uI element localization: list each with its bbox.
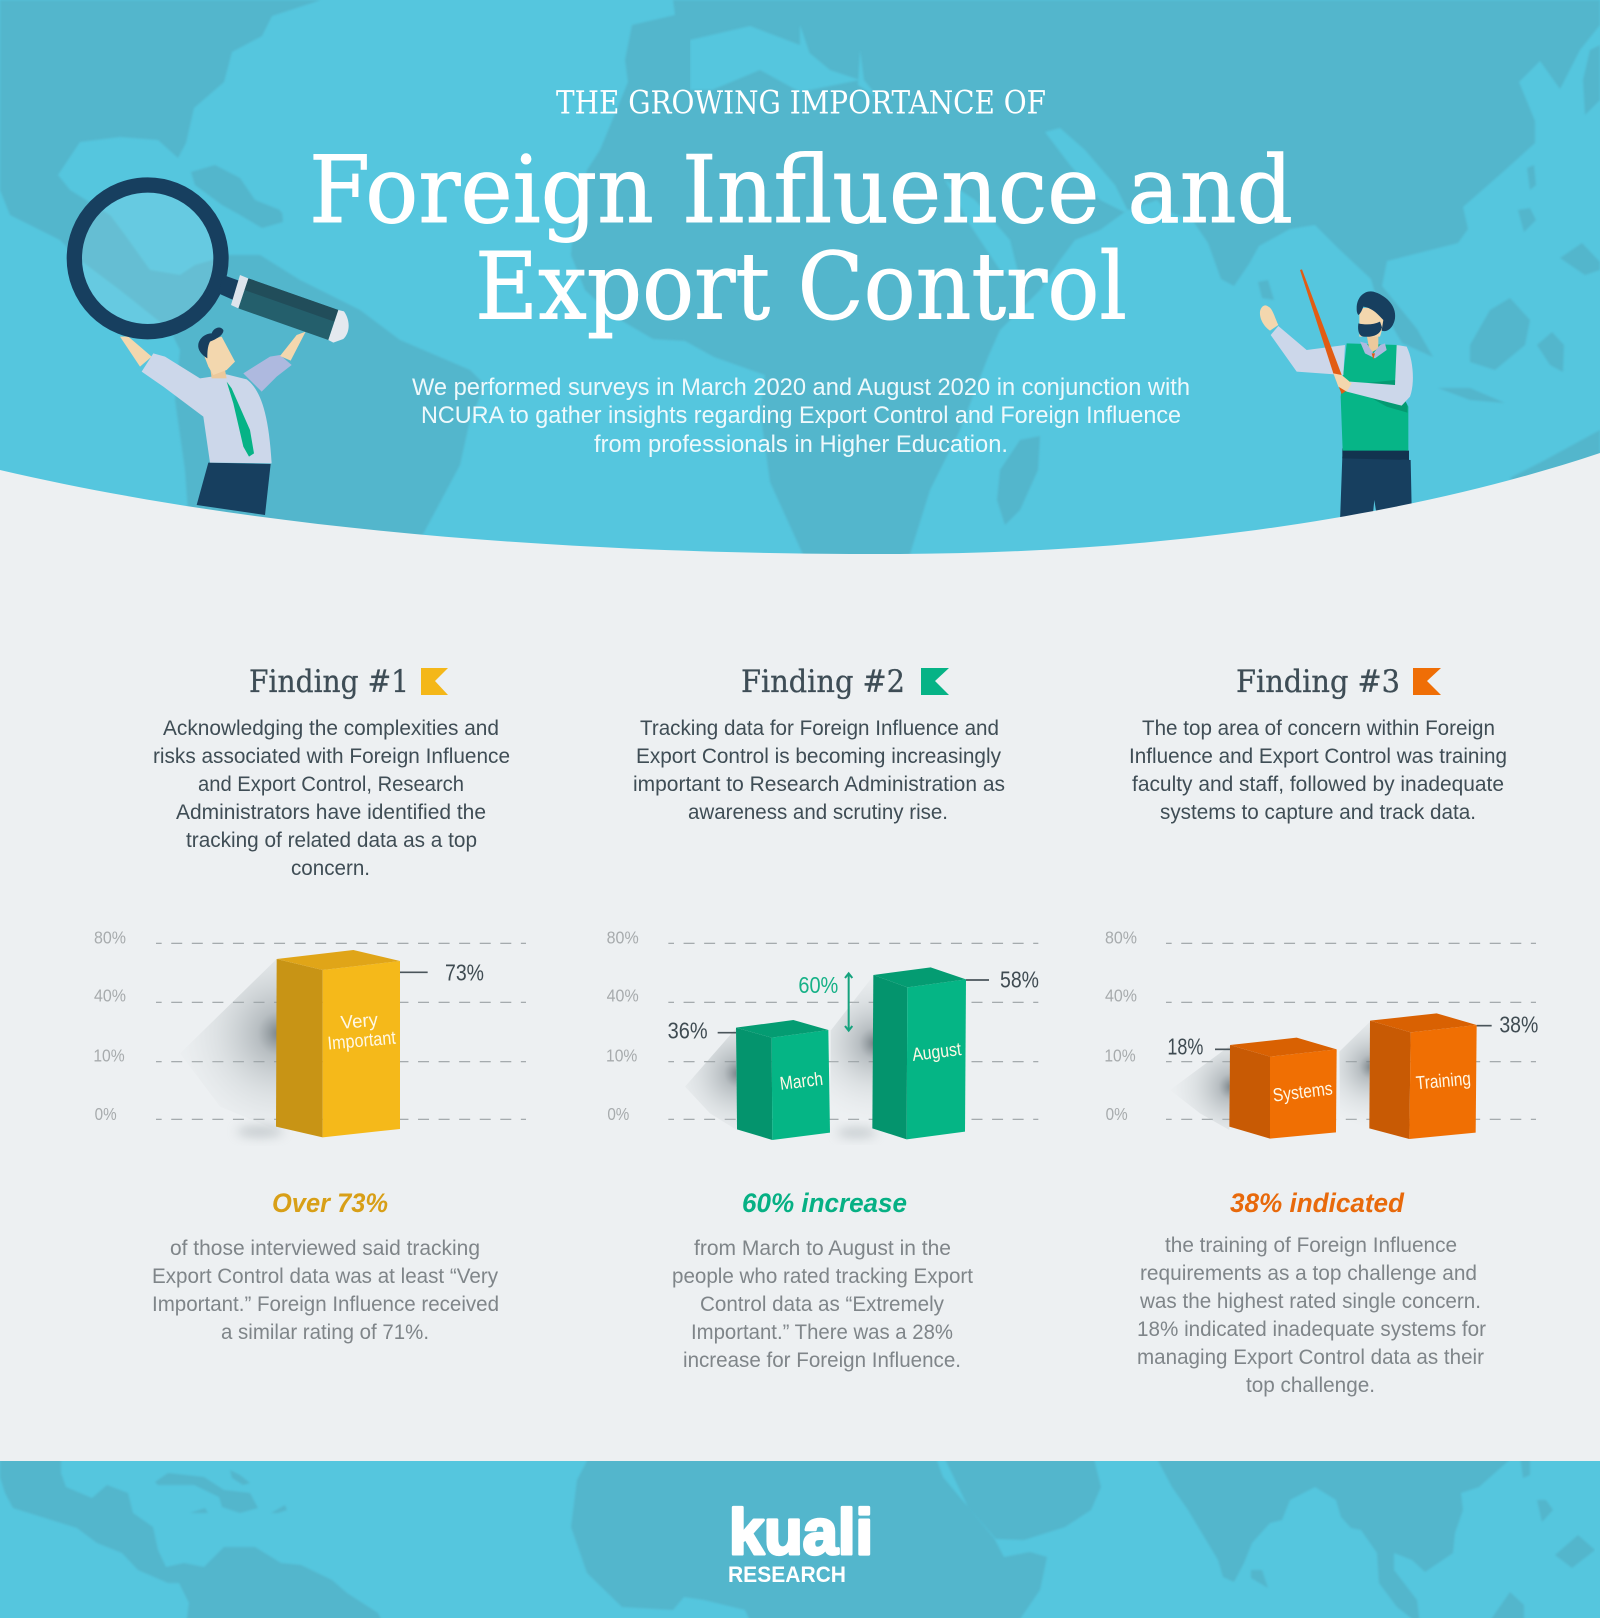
teacher: vest [1341, 343, 1408, 451]
chart: finding 2 [606, 927, 1039, 1140]
finding 2 description: Export Control is becoming increasingly [636, 745, 1001, 768]
chart: finding 3 [1104, 927, 1538, 1139]
intro text: NCURA to gather insights regarding Export Control and Foreign Influence [421, 402, 1181, 429]
value: 73% [400, 960, 484, 986]
finding 3 callout: 38% indicated [1230, 1188, 1404, 1218]
finding 1 callout: Over 73% [272, 1188, 388, 1218]
finding 3 explanation: managing Export Control data as their [1137, 1346, 1484, 1369]
man: near hand [120, 337, 152, 367]
axis labels: 40% [94, 986, 126, 1006]
axis labels [606, 927, 639, 1124]
axis labels [93, 927, 126, 1124]
man: far arm [243, 332, 306, 392]
finding 3 description: systems to capture and track data. [1160, 801, 1476, 824]
intro text [412, 374, 1190, 458]
icon: green flag [921, 668, 949, 695]
illustration: teacher with pointer [1260, 269, 1413, 522]
finding 1 explanation [152, 1237, 499, 1344]
finding 1 description [153, 717, 510, 880]
teacher: raised arm [1260, 305, 1345, 375]
finding 2 explanation [672, 1237, 973, 1372]
logo: kuali research: RESEARCH [728, 1562, 846, 1587]
finding 2 description: important to Research Administration as [633, 773, 1005, 796]
finding 2 explanation: from March to August in the [694, 1237, 951, 1260]
bar shadow [180, 959, 283, 1137]
finding 3 explanation: top challenge. [1246, 1374, 1375, 1397]
finding 1 description: Administrators have identified the [176, 801, 486, 824]
panel: finding 2 [606, 664, 1039, 1372]
finding 2 explanation: people who rated tracking Export [672, 1265, 973, 1288]
axis labels: 0% [1106, 1104, 1128, 1124]
finding 1 description: risks associated with Foreign Influence [153, 745, 510, 768]
teacher: belt [1342, 448, 1409, 460]
footer background [0, 1461, 1600, 1618]
finding 2 explanation: Important.” There was a 28% [691, 1321, 953, 1344]
finding 3 description: Influence and Export Control was training [1129, 745, 1507, 768]
man: shirt [142, 353, 272, 463]
finding 3 explanation: the training of Foreign Influence [1165, 1234, 1457, 1257]
axis labels: 80% [607, 927, 639, 947]
finding 3 explanation [1137, 1234, 1486, 1397]
finding 1 description: concern. [291, 857, 370, 880]
body background with curved top [0, 453, 1600, 1461]
axis labels: 10% [606, 1046, 637, 1066]
finding 3 description: faculty and staff, followed by inadequate [1132, 773, 1504, 796]
axis labels: 10% [1104, 1046, 1136, 1066]
man: head [198, 328, 235, 378]
bar: training 38%: Training [1415, 1068, 1472, 1093]
axis labels: 0% [95, 1104, 117, 1124]
axis labels: 40% [607, 986, 639, 1006]
finding 3 description: The top area of concern within Foreign [1142, 717, 1495, 740]
axis labels: 80% [1105, 927, 1137, 947]
man: tie [227, 382, 254, 457]
value: 58%: 58% [1000, 967, 1039, 993]
header background [0, 0, 1600, 570]
value: 73%: 73% [445, 960, 484, 986]
panel: finding 1 [93, 664, 526, 1344]
arrow: 60% increase [798, 972, 852, 1031]
finding 2 explanation: Control data as “Extremely [700, 1293, 944, 1316]
axis labels: 80% [94, 927, 126, 947]
finding 3 heading: Finding #3 [1236, 664, 1400, 700]
finding 1 explanation: Export Control data was at least “Very [152, 1265, 498, 1288]
bar: systems 18%: Systems [1272, 1077, 1334, 1106]
axis labels: 0% [607, 1104, 629, 1124]
title: Foreign Influence and [309, 136, 1293, 244]
map: light seas over landmass [690, 25, 1130, 280]
teacher: pointer [1300, 269, 1347, 394]
finding 1 heading: Finding #1 [249, 664, 409, 700]
intro text: from professionals in Higher Education. [594, 431, 1008, 458]
teacher: head [1357, 291, 1395, 359]
arrow: 60% increase: 60% [798, 972, 838, 998]
bar: very important 73%: Very [340, 1009, 379, 1033]
bar shadows [685, 976, 877, 1137]
finding 1 explanation: of those interviewed said tracking [170, 1237, 480, 1260]
finding 3 explanation: was the highest rated single concern. [1139, 1290, 1481, 1313]
bar: march 36%: March [779, 1068, 824, 1094]
logo: kuali research: kuali [729, 1496, 873, 1568]
bar: training 38% [1369, 1013, 1477, 1139]
teacher: near arm [1333, 345, 1413, 406]
man: pants [197, 463, 271, 515]
bar: august 58% [872, 967, 966, 1139]
axis labels [1104, 927, 1137, 1124]
axis labels: 40% [1105, 986, 1137, 1006]
finding 3 explanation: 18% indicated inadequate systems for [1137, 1318, 1486, 1341]
panel: finding 3 [1104, 664, 1538, 1397]
icon: orange flag [1413, 668, 1441, 695]
finding 1 explanation: Important.” Foreign Influence received [152, 1293, 499, 1316]
bar: march 36% [736, 1020, 830, 1140]
finding 2 heading: Finding #2 [741, 664, 905, 700]
finding 3 description [1129, 717, 1507, 824]
finding 2 explanation: increase for Foreign Influence. [683, 1349, 961, 1372]
magnifying glass [74, 185, 349, 343]
intro text: We performed surveys in March 2020 and August 2020 in conjunction with [412, 374, 1190, 401]
finding 2 description: Tracking data for Foreign Influence and [640, 717, 999, 740]
value: 36%: 36% [668, 1017, 708, 1043]
world map: footer [0, 1455, 1595, 1618]
world map: header [0, 0, 1600, 570]
value: 38%: 38% [1499, 1012, 1538, 1038]
subtitle: THE GROWING IMPORTANCE OF [556, 84, 1046, 122]
bar: very important 73% [276, 950, 400, 1137]
finding 2 description: awareness and scrutiny rise. [688, 801, 948, 824]
title: Export Control [475, 232, 1127, 340]
value: 18%: 18% [1167, 1033, 1203, 1059]
bar shadows [1170, 1022, 1370, 1130]
finding 1 description: tracking of related data as a top [186, 829, 477, 852]
bar: systems 18% [1229, 1038, 1337, 1139]
value: 36% [668, 1017, 736, 1043]
finding 1 explanation: a similar rating of 71%. [221, 1321, 429, 1344]
finding 2 callout: 60% increase [742, 1188, 907, 1218]
finding 3 explanation: requirements as a top challenge and [1140, 1262, 1477, 1285]
finding 2 description [633, 717, 1005, 824]
teacher: pants [1340, 457, 1412, 522]
chart: finding 1 [93, 927, 526, 1137]
bar: august 58%: August [911, 1038, 963, 1065]
icon: yellow flag [421, 668, 448, 695]
finding 1 description: Acknowledging the complexities and [163, 717, 499, 740]
value: 38% [1477, 1012, 1538, 1038]
value: 58% [966, 967, 1039, 993]
bar: very important 73%: Important [327, 1027, 397, 1054]
illustration: man holding magnifying glass [74, 185, 349, 515]
axis labels: 10% [93, 1046, 125, 1066]
title [309, 136, 1293, 340]
finding 1 description: and Export Control, Research [198, 773, 464, 796]
